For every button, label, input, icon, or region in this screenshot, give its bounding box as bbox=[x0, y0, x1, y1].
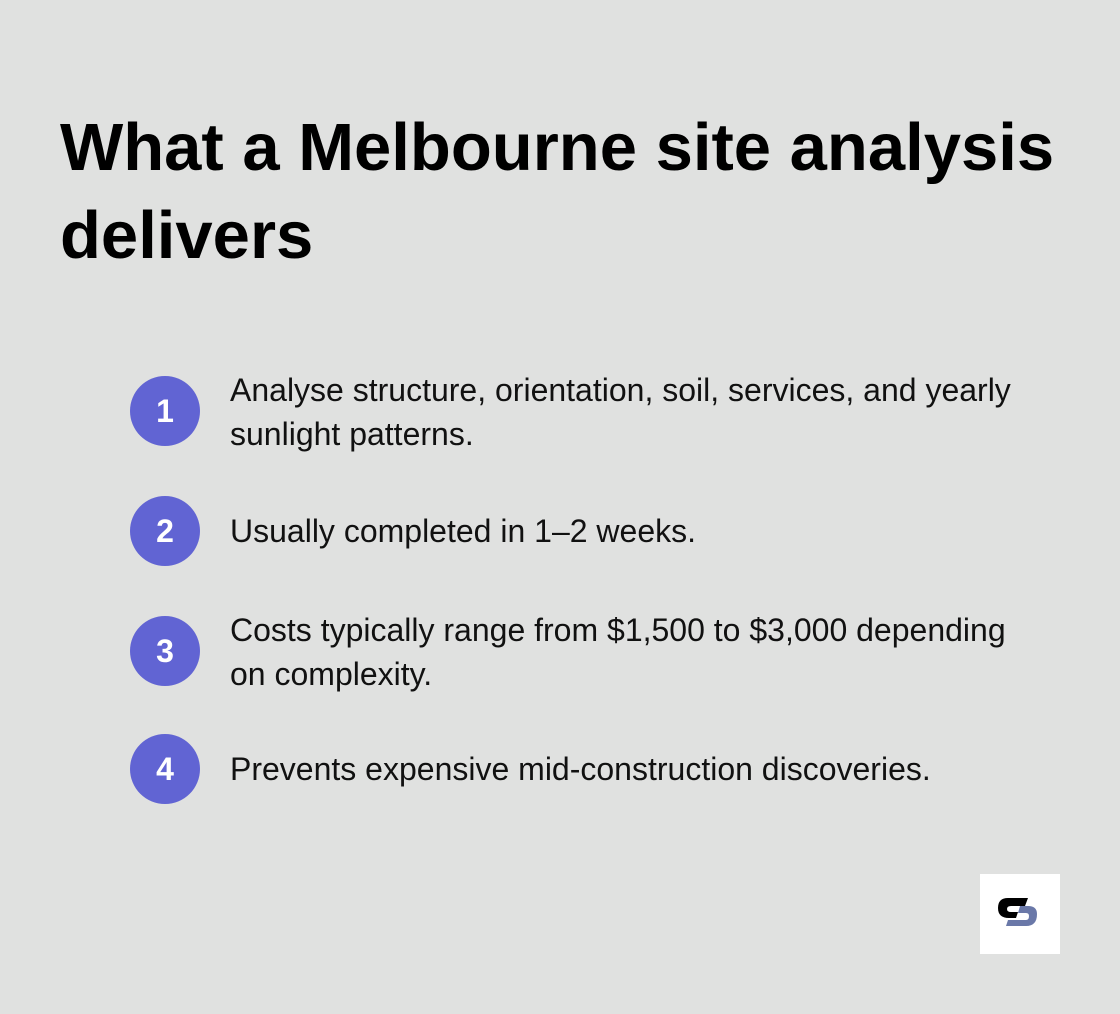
text 2: Usually completed in 1–2 weeks. bbox=[230, 513, 696, 549]
text 3: Costs typically range from $1,500 to $3,000 depending on complexity. bbox=[230, 612, 1006, 692]
circle 2: 2 bbox=[156, 513, 174, 549]
circle 3: 3 bbox=[156, 633, 174, 669]
text 1: Analyse structure, orientation, soil, services, and yearly sunlight patterns. bbox=[230, 372, 1011, 452]
circle 4: 4 bbox=[156, 751, 174, 787]
circle 1: 1 bbox=[156, 393, 174, 429]
item 2 bbox=[130, 496, 696, 566]
logo bbox=[980, 874, 1060, 954]
item 3 bbox=[130, 612, 1006, 692]
item 1 bbox=[130, 372, 1011, 452]
circle 1 bbox=[130, 376, 200, 446]
circle 4 bbox=[130, 734, 200, 804]
text 4: Prevents expensive mid-construction discoveries. bbox=[230, 751, 931, 787]
item 4 bbox=[130, 734, 931, 804]
circle 2 bbox=[130, 496, 200, 566]
circle 3 bbox=[130, 616, 200, 686]
title: What a Melbourne site analysis delivers bbox=[60, 110, 1054, 273]
